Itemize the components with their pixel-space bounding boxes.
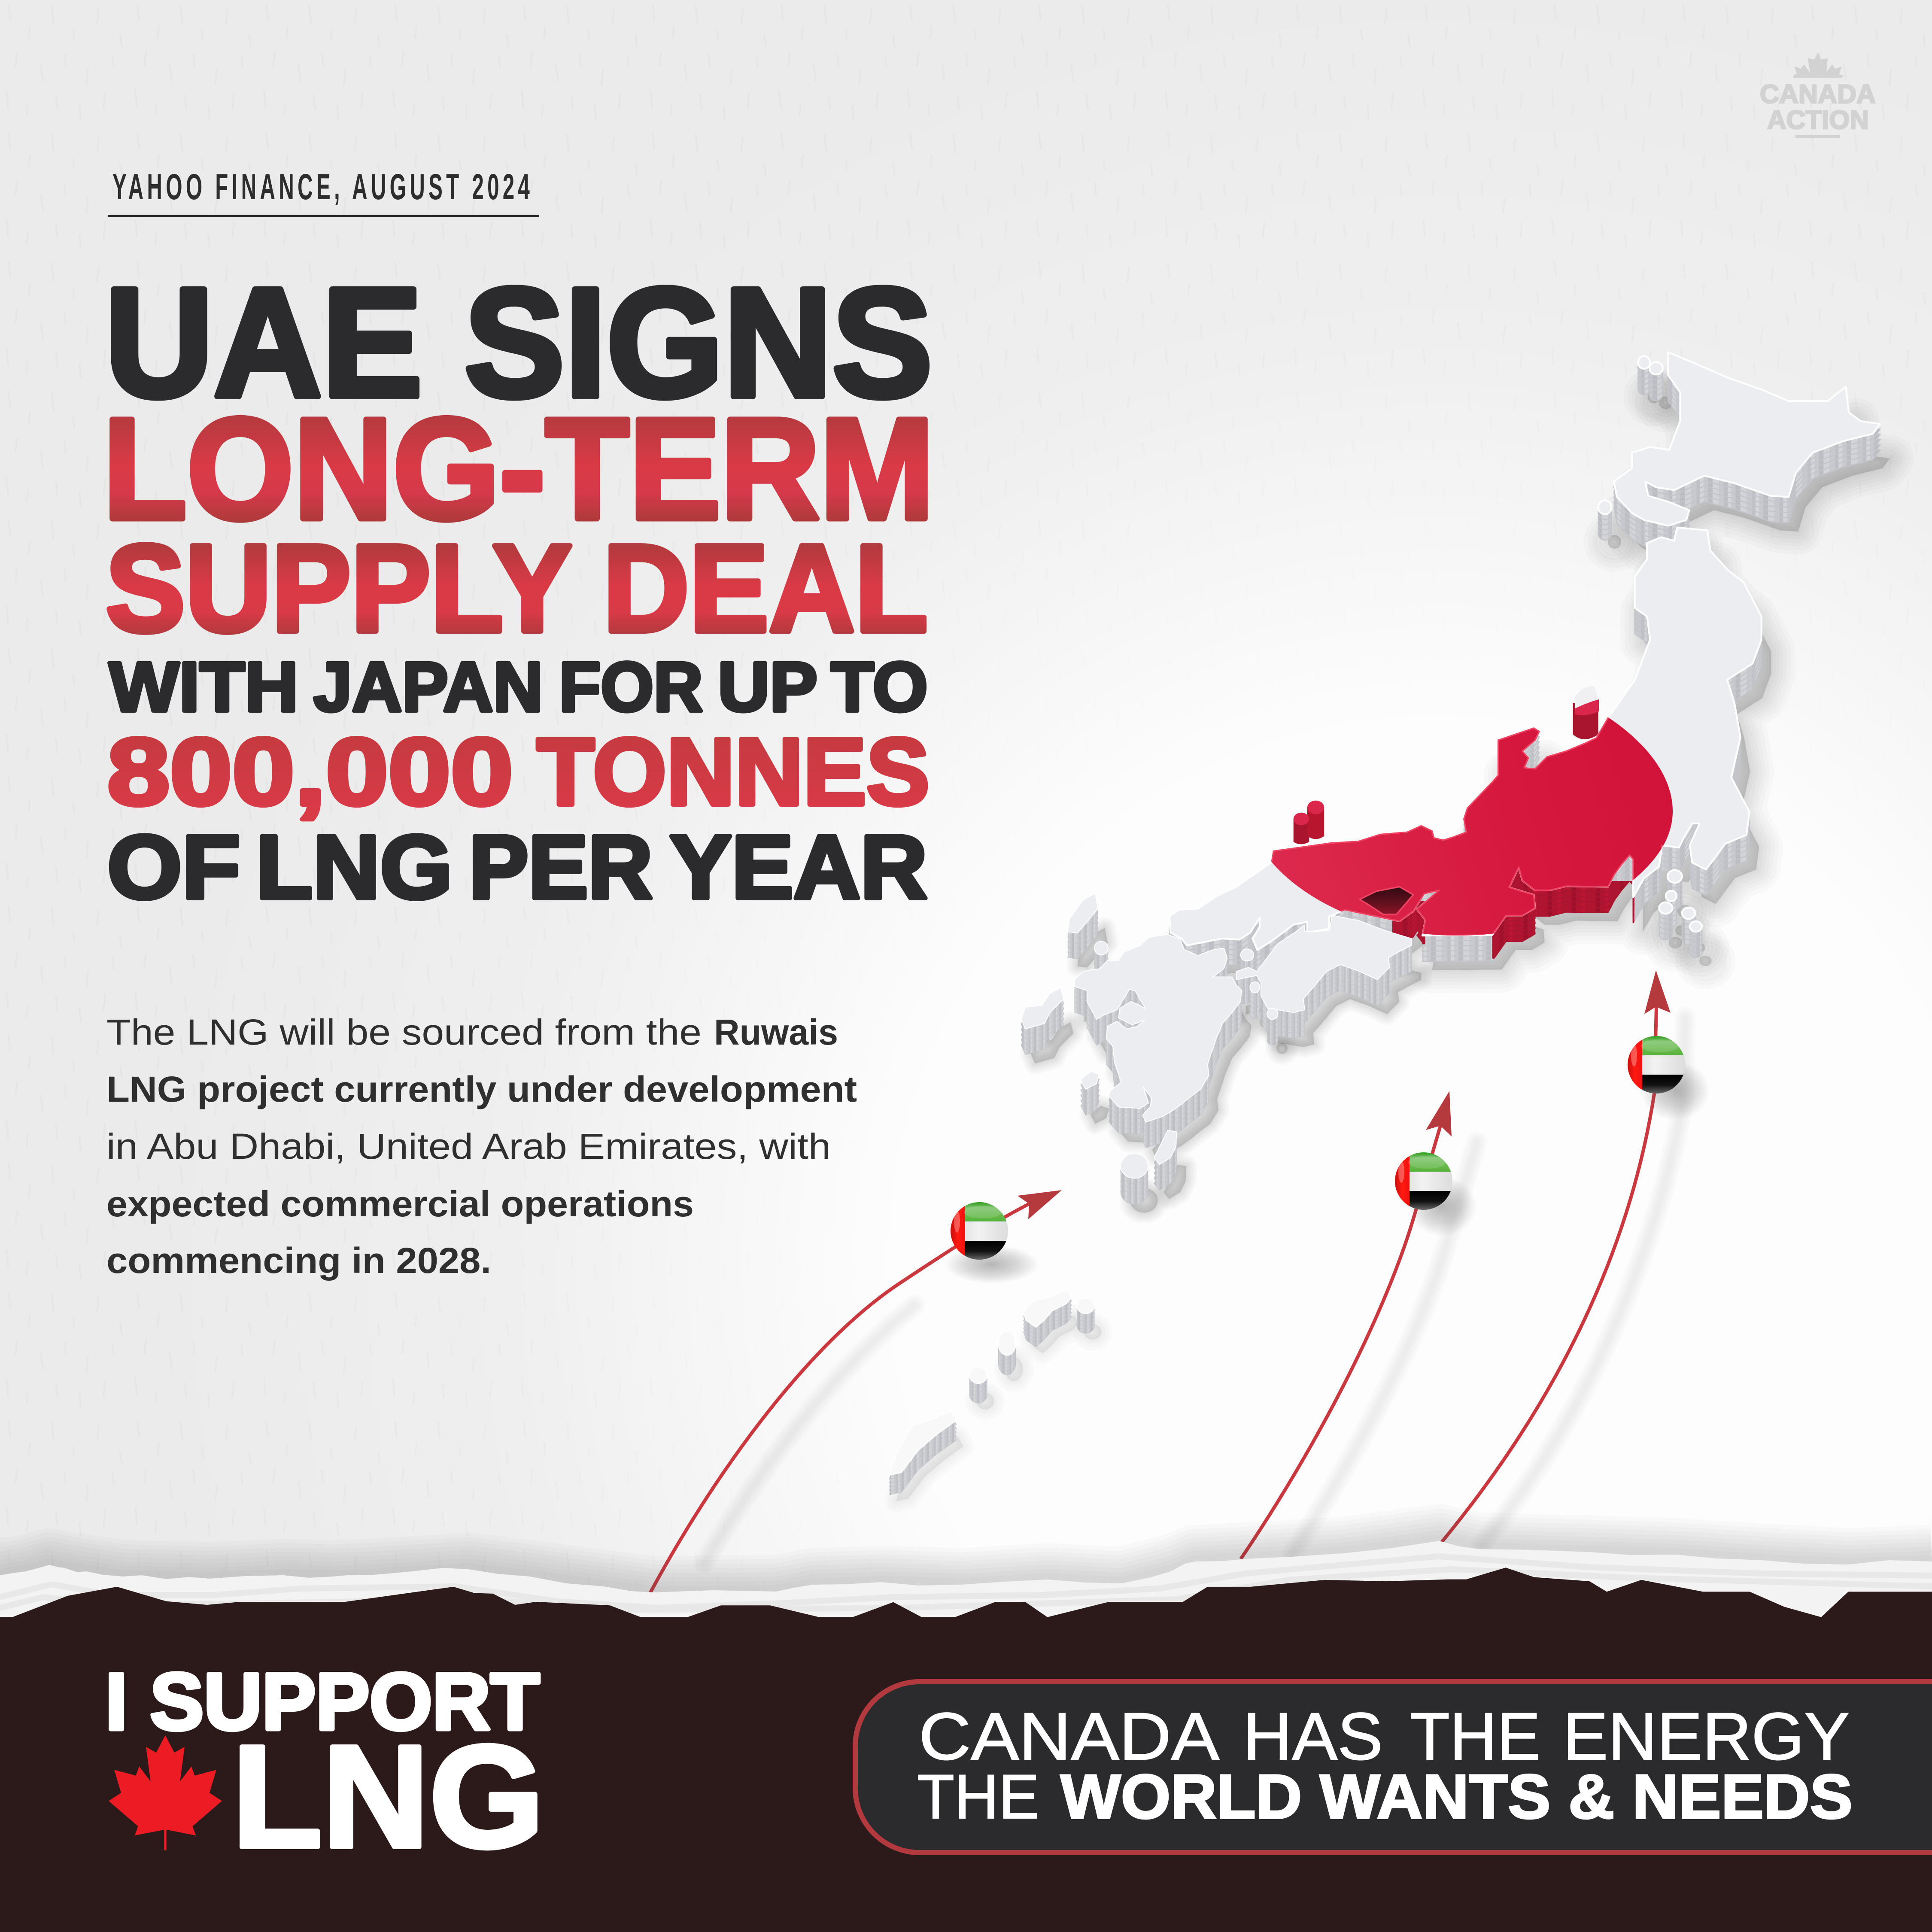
icon: UAE flag badge 1 bbox=[945, 1202, 1039, 1284]
watermark: Canada Action logo bbox=[1760, 52, 1876, 138]
icon: maple leaf bbox=[109, 1735, 222, 1850]
map top surface bbox=[1021, 352, 1880, 1178]
headline: UP bbox=[718, 647, 817, 726]
map extruded sides bbox=[1021, 357, 1880, 1204]
watermark: Canada Action logo: ACTION bbox=[1767, 105, 1869, 134]
Ryukyu sides bbox=[889, 1294, 1094, 1495]
slogan pill: THE bbox=[1410, 1699, 1540, 1774]
headline: UAE SIGNS bbox=[105, 255, 933, 429]
arrow 3: UAE route to Tokyo bbox=[1439, 970, 1671, 1545]
Ryukyu islands bbox=[889, 1289, 1101, 1501]
body paragraph: commencing in 2028. bbox=[106, 1240, 491, 1281]
headline: JAPAN bbox=[313, 647, 543, 726]
slogan pill: HAS bbox=[1243, 1699, 1383, 1774]
body paragraph bbox=[106, 1012, 857, 1281]
headline: TONNES bbox=[537, 719, 930, 825]
flag disc on the map bbox=[1271, 717, 1673, 936]
arrow shadows bbox=[704, 1018, 1685, 1563]
headline: OF bbox=[107, 817, 240, 917]
slogan pill: WORLD WANTS & NEEDS bbox=[1060, 1762, 1853, 1832]
icon: UAE flag badge 3 bbox=[1628, 1036, 1710, 1121]
body paragraph: expected commercial operations bbox=[106, 1184, 694, 1224]
body paragraph: Ruwais bbox=[714, 1012, 838, 1052]
slogan pill: ENERGY bbox=[1563, 1699, 1850, 1774]
icon: UAE flag badge 2 bbox=[1395, 1152, 1477, 1236]
source line: Yahoo Finance, August 2024: YAHOO FINANCE, AUGUST 2024 bbox=[112, 167, 533, 207]
Sado island bbox=[1573, 687, 1599, 739]
red extruded sides bbox=[1021, 357, 1880, 1204]
watermark: Canada Action logo: CANADA bbox=[1760, 79, 1876, 109]
torn paper edge bbox=[0, 1541, 1932, 1640]
body paragraph: in Abu Dhabi, United Arab Emirates, with bbox=[106, 1126, 831, 1166]
headline: PER bbox=[469, 817, 653, 917]
dark footer band bbox=[0, 1567, 1932, 1932]
I Support LNG logo: I SUPPORT bbox=[105, 1656, 540, 1747]
headline: LONG-TERM bbox=[103, 389, 934, 550]
source line: Yahoo Finance, August 2024 bbox=[108, 167, 539, 217]
Lake Biwa depression bbox=[1360, 887, 1413, 914]
body paragraph: LNG project currently under development bbox=[106, 1069, 857, 1109]
arrow 2: UAE route to Honshu bbox=[1241, 1091, 1452, 1559]
headline: LNG bbox=[256, 817, 453, 917]
headline: TO bbox=[831, 647, 928, 726]
Ryukyu tops bbox=[889, 1289, 1094, 1475]
Oki islands bbox=[1294, 801, 1324, 844]
slogan pill bbox=[855, 1682, 1932, 1853]
headline: SUPPLY DEAL bbox=[106, 519, 928, 658]
headline: WITH bbox=[109, 647, 298, 726]
arrow 1: UAE route to Kyushu bbox=[650, 1190, 1062, 1592]
slogan pill: THE bbox=[917, 1762, 1039, 1832]
Ryukyu shadow bbox=[896, 1315, 1101, 1501]
headline: 800,000 bbox=[107, 719, 513, 825]
headline: FOR bbox=[559, 647, 703, 726]
I Support LNG logo bbox=[105, 1656, 544, 1878]
body paragraph: The LNG will be sourced from the bbox=[106, 1012, 702, 1052]
I Support LNG logo: LNG bbox=[232, 1715, 544, 1878]
slogan pill: CANADA bbox=[919, 1699, 1219, 1774]
headline bbox=[103, 255, 934, 917]
map ground shadow bbox=[1031, 387, 1890, 1213]
headline: YEAR bbox=[670, 817, 927, 917]
3D map of Japan bbox=[1021, 352, 1890, 1213]
